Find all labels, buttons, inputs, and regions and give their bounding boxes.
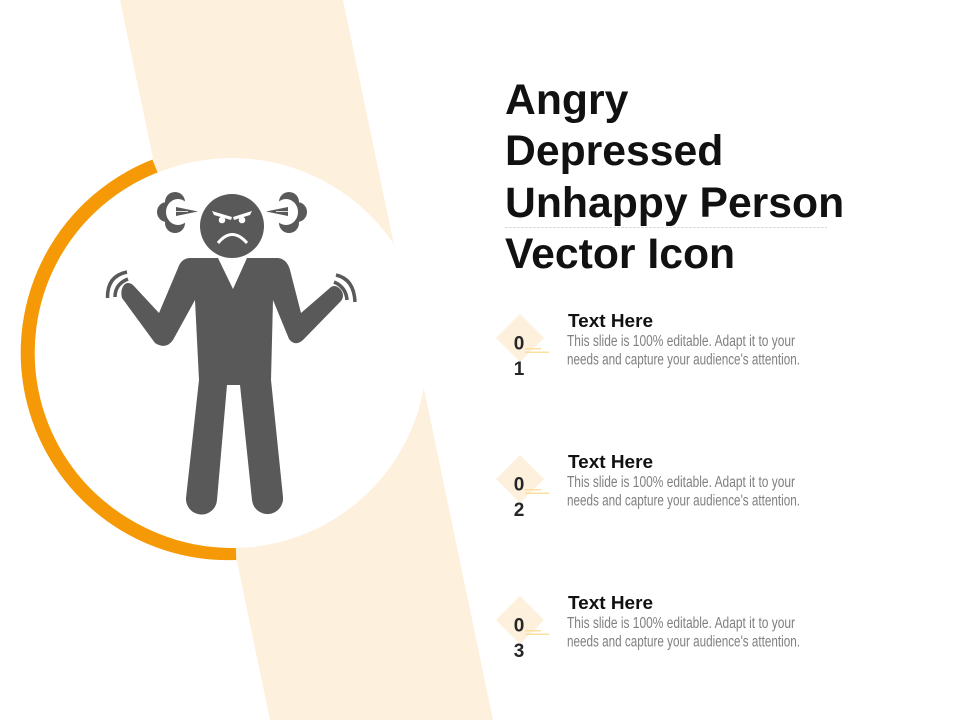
diamond badge 03 xyxy=(496,596,549,662)
diamond badge 01: 0 xyxy=(514,334,524,354)
diamond badge 01: 1 xyxy=(514,359,525,380)
diamond badge 02: 2 xyxy=(514,500,524,521)
item 03 xyxy=(496,593,800,662)
item description 02: needs and capture your audience's attention. xyxy=(567,492,800,510)
head with angry face xyxy=(200,194,264,258)
right steam cloud xyxy=(266,192,307,233)
diamond badge 01 xyxy=(496,314,549,380)
body, arms and legs xyxy=(121,258,343,515)
item 02 xyxy=(496,452,800,521)
diamond badge 03: 0 xyxy=(514,616,524,636)
title: Unhappy Person xyxy=(505,179,844,227)
item description 02: This slide is 100% editable. Adapt it to your xyxy=(567,474,795,491)
title: Vector Icon xyxy=(505,230,735,278)
item description 01: needs and capture your audience's attention. xyxy=(567,352,800,368)
title: Depressed xyxy=(505,127,723,175)
item heading 01: Text Here xyxy=(568,311,653,331)
title: Angry xyxy=(505,76,629,124)
diamond badge 02 xyxy=(496,455,549,521)
background diagonal band xyxy=(120,0,493,720)
item heading 03: Text Here xyxy=(568,593,653,613)
right hand motion lines xyxy=(334,275,355,302)
item heading 02: Text Here xyxy=(568,452,653,472)
item 01 xyxy=(496,311,800,380)
diamond badge 02: 0 xyxy=(514,474,524,496)
diamond badge 03: 3 xyxy=(514,641,524,662)
item description 03: needs and capture your audience's attention. xyxy=(567,634,800,650)
white circle xyxy=(37,158,427,548)
left hand motion lines xyxy=(107,272,128,298)
item description 03: This slide is 100% editable. Adapt it to your xyxy=(567,615,795,632)
icon: angry person xyxy=(107,192,355,515)
left steam cloud xyxy=(157,192,198,233)
item description 01: This slide is 100% editable. Adapt it to your xyxy=(567,333,795,350)
orange arc ring xyxy=(28,166,236,553)
